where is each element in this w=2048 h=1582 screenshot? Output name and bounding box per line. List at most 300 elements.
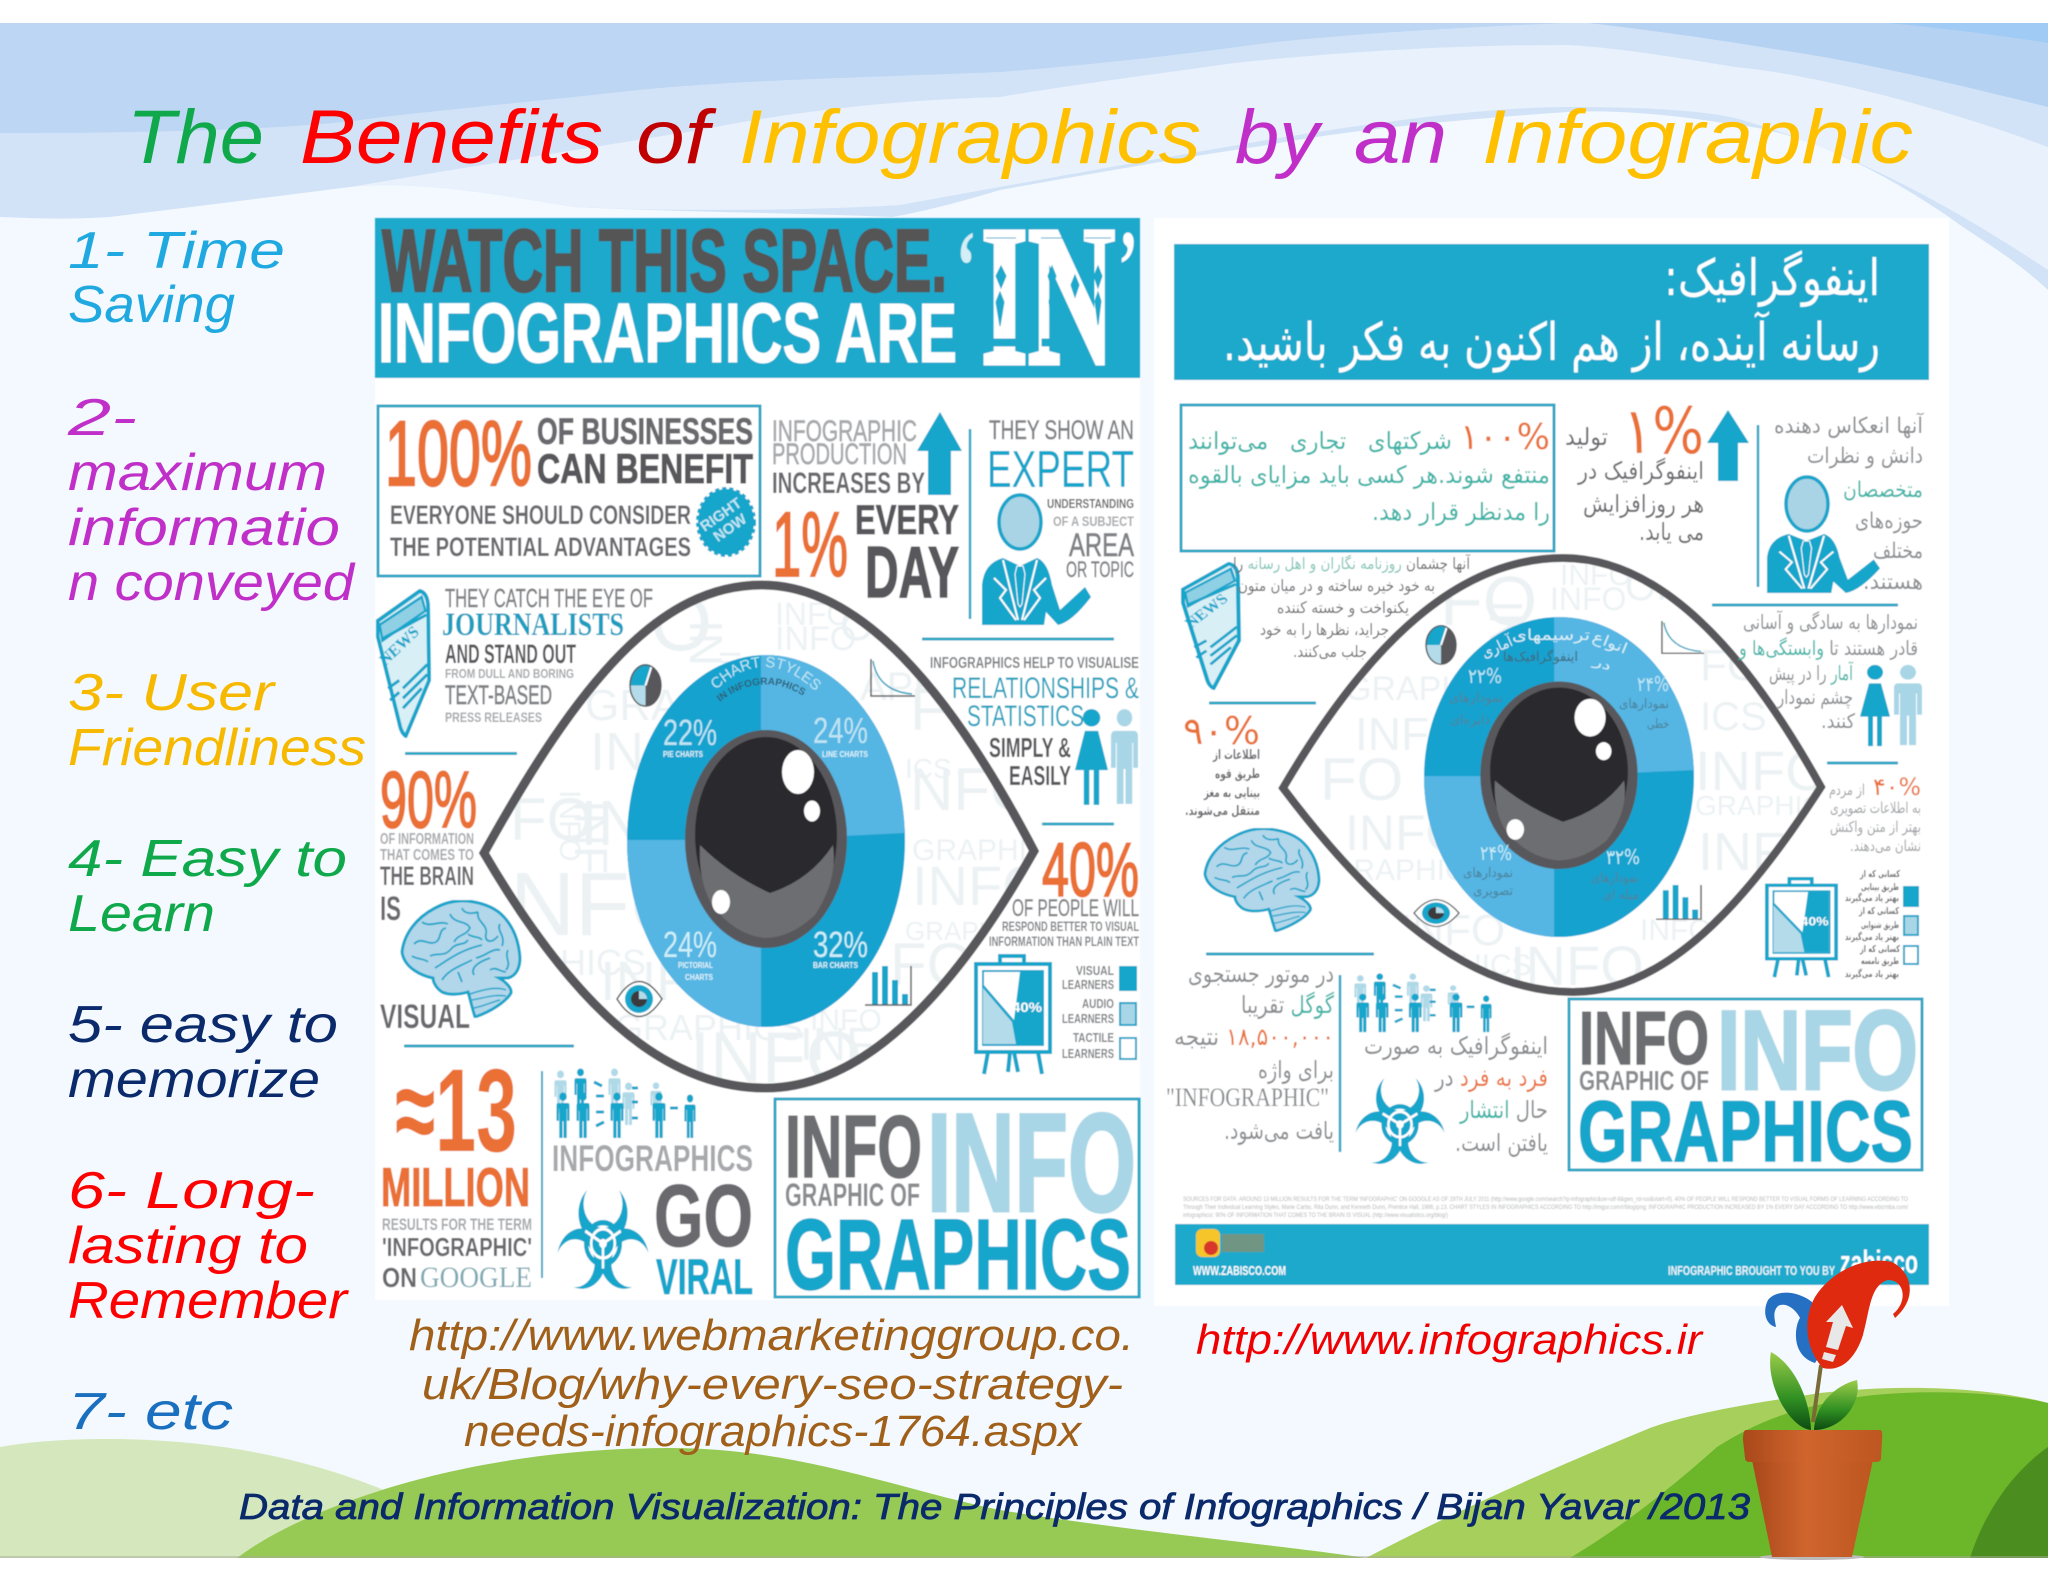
- watermark text: [1320, 559, 1841, 997]
- iris labels: 24%: [813, 710, 868, 751]
- 40 percent block: نشان می‌دهند.: [1850, 837, 1921, 855]
- legend: بهتر یاد می‌گیرند: [1845, 968, 1899, 980]
- 40 percent block: [976, 824, 1139, 1074]
- expert block: متخصصان: [1843, 478, 1923, 503]
- watermark text: INFO: [775, 596, 851, 632]
- blue paisley: [1765, 1293, 1830, 1363]
- item 6: lasting to: [68, 1217, 308, 1275]
- callout: 100 percent box: EVERYONE SHOULD CONSIDER: [390, 500, 691, 530]
- iris labels: دایره‌ای: [1450, 713, 1490, 728]
- relationships block: [922, 639, 1139, 805]
- journalists block: THEY CATCH THE EYE OF: [445, 583, 653, 613]
- watermark text: INFO: [775, 620, 856, 658]
- icon: crowd: [554, 1068, 696, 1138]
- icon: couple: [1075, 709, 1138, 805]
- 40 percent block: INFORMATION THAN PLAIN TEXT: [989, 933, 1139, 949]
- title: Infographic: [1482, 95, 1913, 180]
- iris labels: نمودارهای: [1463, 866, 1513, 881]
- icon: brain: [402, 901, 520, 1017]
- journalists block: AND STAND OUT: [445, 639, 576, 669]
- source url left: http://www.webmarketinggroup.co.: [409, 1311, 1134, 1360]
- relationships block: INFOGRAPHICS HELP TO VISUALISE: [930, 655, 1139, 672]
- callout: 100 percent box: OF BUSINESSES: [537, 411, 753, 452]
- icon: couple: [1860, 665, 1922, 746]
- legend: AUDIO: [1082, 996, 1114, 1011]
- relationships block: RELATIONSHIPS &: [952, 672, 1139, 705]
- banner: WATCH THIS SPACE.: [382, 211, 947, 310]
- google stat: RESULTS FOR THE TERM: [382, 1215, 532, 1234]
- google stat: GOOGLE: [420, 1261, 532, 1294]
- legend: طریق نامسه: [1861, 956, 1899, 967]
- legend: کسانی که از: [1859, 869, 1900, 880]
- title: Infographics: [739, 95, 1201, 180]
- expert block: دانش و نظرات: [1807, 444, 1923, 469]
- watermark text: ICS: [1700, 695, 1767, 739]
- icon: expert: [982, 495, 1091, 625]
- iris labels: نمودارهای: [1449, 691, 1503, 706]
- iris labels: میله ای: [1603, 888, 1639, 903]
- item 7: 7- etc: [68, 1383, 233, 1441]
- journalists block: [376, 583, 653, 736]
- journalists block: TEXT-BASED: [445, 680, 552, 710]
- 40 percent block: [1767, 763, 1921, 980]
- iris labels: 24%: [663, 924, 717, 965]
- icon: newspaper: [376, 591, 429, 736]
- viral block: [548, 1068, 753, 1305]
- item 5: memorize: [68, 1051, 320, 1109]
- watermark text: INFO: [553, 790, 586, 862]
- info graphic box: GRAPHIC OF: [1579, 1065, 1709, 1096]
- icon: pie chart: [630, 664, 661, 706]
- watermark text: INFO: [1640, 914, 1712, 947]
- legend: کسانی که از: [1859, 944, 1900, 955]
- legend: بهتر یاد می‌گیرند: [1845, 892, 1899, 904]
- 90 percent block: منتقل می‌شوند.: [1185, 804, 1260, 819]
- expert block: OF A SUBJECT: [1053, 513, 1134, 529]
- item 2: [67, 389, 356, 612]
- legend: TACTILE: [1073, 1030, 1114, 1045]
- info graphic box: GRAPHICS: [785, 1199, 1131, 1311]
- footer bar: INFOGRAPHIC BROUGHT TO YOU BY: [1668, 1263, 1835, 1278]
- production stat: [772, 412, 962, 613]
- callout: 100 percent box: ۱۰۰%: [1460, 417, 1550, 458]
- expert block: مختلف: [1873, 539, 1923, 564]
- production stat: می یابد.: [1639, 518, 1704, 546]
- watermark text: IN: [1480, 600, 1532, 646]
- google stat: ON: [382, 1262, 417, 1293]
- badge: right now: RIGHT: [697, 495, 745, 535]
- iris labels: تصویری: [1473, 884, 1513, 899]
- 40 percent block: 40%: [1042, 828, 1139, 913]
- google stat: MILLION: [381, 1156, 530, 1218]
- watermark text: INF: [1355, 708, 1429, 760]
- legend: LEARNERS: [1062, 1046, 1114, 1061]
- watermark text: INF: [565, 800, 617, 874]
- footer bar: [1175, 1224, 1929, 1285]
- production stat: تولید: [1565, 423, 1608, 451]
- panel: english infographic: [374, 186, 1142, 1311]
- relationships block: قادر هستند تا وابستگی‌ها و: [1738, 636, 1918, 660]
- iris labels: آماری: [1479, 632, 1516, 662]
- icon: bar chart: [865, 966, 911, 1005]
- 90 percent block: اطلاعات از: [1212, 748, 1260, 763]
- expert block: آنها انعکاس دهنده: [1774, 412, 1924, 439]
- journalists block: JOURNALISTS: [442, 607, 624, 643]
- pot: [1743, 1430, 1882, 1560]
- watermark text: FO: [910, 676, 993, 743]
- production stat: INCREASES BY: [772, 467, 925, 500]
- item 4: [68, 830, 347, 943]
- icon: biohazard: [1346, 1069, 1454, 1173]
- legend: بهتر یاد می‌گیرند: [1845, 931, 1899, 943]
- info graphic box: INFO: [1717, 988, 1918, 1113]
- watermark text: OIF: [1625, 565, 1692, 609]
- panel: persian infographic: [1154, 218, 1949, 1306]
- watermark text: GRAPHICS: [912, 834, 1069, 867]
- production stat: INFOGRAPHIC: [772, 415, 917, 448]
- item 3: Friendliness: [68, 719, 366, 777]
- watermark text: INFO: [1400, 906, 1505, 955]
- 40 percent block: به اطلاعات تصویری: [1830, 799, 1921, 817]
- 40 percent block: OF PEOPLE WILL: [1012, 895, 1139, 922]
- 40 percent block: بهتر از متن واکنش: [1830, 818, 1921, 836]
- icon: potted plant logo: [1743, 1261, 1910, 1560]
- source urls: [409, 1311, 1704, 1456]
- production stat: PRODUCTION: [772, 438, 907, 471]
- info graphic box: GRAPHICS: [1578, 1084, 1913, 1180]
- iris labels: 32%: [813, 924, 868, 965]
- watermark text: GRAPH: [1345, 670, 1466, 708]
- arrow up: [917, 412, 962, 495]
- callout: 100 percent box: را مدنظر قرار دهد.: [1372, 498, 1550, 526]
- eye outline: [1283, 558, 1821, 992]
- google stat: ۱۸,۵۰۰,۰۰۰ نتیجه: [1174, 1023, 1334, 1051]
- item 2: 2-: [67, 389, 137, 447]
- callout: 100 percent box: [1181, 405, 1554, 551]
- icon: easel: [976, 956, 1050, 1074]
- item 5: 5- easy to: [68, 996, 338, 1054]
- expert block: [1758, 412, 1924, 595]
- watermark text: GRA: [585, 681, 681, 730]
- eye iris and pupil: [1424, 617, 1694, 937]
- banner: رسانه آینده، از هم اکنون به فکر باشید.: [1223, 310, 1880, 373]
- 90 percent block: IS: [380, 890, 401, 928]
- info graphic box: INFO: [1579, 996, 1709, 1080]
- production stat: اینفوگرافیک در: [1577, 457, 1704, 485]
- google stat: در موتور جستجوی: [1188, 960, 1334, 988]
- watermark text: NFO: [910, 756, 1037, 823]
- watermark text: INFO: [1695, 739, 1829, 802]
- watermark text: FO: [890, 931, 973, 998]
- info graphic box: [1569, 988, 1922, 1180]
- banner: اینفوگرافیک:: [1664, 249, 1880, 307]
- icon: line chart: [1662, 621, 1704, 653]
- relationships block: STATISTICS: [967, 700, 1084, 733]
- decorative IN lettering: [956, 186, 1138, 407]
- footer citation: Data and Information Visualization: The Principles of Infographics / Bijan Yavar /2013: [239, 1486, 1750, 1527]
- watermark text: GRAPHICS: [1330, 854, 1487, 887]
- expert block: THEY SHOW AN: [989, 415, 1134, 445]
- iris labels: نمودارهای: [1591, 871, 1639, 886]
- iris labels: ۲۴%: [1480, 841, 1512, 865]
- legend: کسانی که از: [1858, 906, 1899, 917]
- 40 percent block: ۴۰%: [1873, 773, 1921, 801]
- leaves: [1770, 1352, 1811, 1430]
- title: Benefits: [300, 95, 603, 180]
- icon: expert: [1767, 477, 1880, 593]
- google stat: برای واژه: [1258, 1056, 1334, 1084]
- expert block: EXPERT: [987, 441, 1134, 499]
- expert block: AREA: [1069, 527, 1134, 563]
- google stat: [381, 1045, 574, 1294]
- source url right: http://www.infographics.ir: [1196, 1316, 1704, 1363]
- journalists block: یکنواخت و خسته کننده: [1277, 598, 1409, 618]
- banner: [375, 186, 1140, 407]
- watermark text: APHICS: [860, 665, 1009, 709]
- 90 percent block: VISUAL: [380, 998, 470, 1036]
- logo: [1196, 1229, 1264, 1257]
- relationships block: آمار را در پیش: [1769, 660, 1854, 686]
- viral block: فرد به فرد در: [1434, 1064, 1548, 1092]
- watermark text: GRAPHICS: [615, 1007, 803, 1048]
- title: of: [636, 95, 717, 180]
- badge: right now: NOW: [710, 510, 751, 546]
- 90 percent block: [1183, 703, 1319, 931]
- viral block: [1346, 973, 1548, 1173]
- production stat: [1565, 395, 1749, 546]
- expert block: هستند.: [1863, 570, 1923, 595]
- legend: LEARNERS: [1062, 1011, 1114, 1026]
- 90 percent block: THE BRAIN: [380, 861, 474, 891]
- viral block: اینفوگرافیک به صورت: [1364, 1032, 1548, 1060]
- decorative IN lettering: ‘: [956, 210, 976, 321]
- watermark text: GRAPHICS: [1695, 790, 1841, 821]
- title: [127, 95, 1913, 180]
- legend: طریق بینایی: [1861, 882, 1899, 893]
- watermark text: FO: [1320, 746, 1403, 813]
- watermark text: FO: [1440, 562, 1537, 640]
- white arrow: [1822, 1305, 1853, 1362]
- legend: LEARNERS: [1062, 977, 1114, 992]
- iris labels: 22%: [663, 712, 717, 753]
- production stat: ۱%: [1623, 395, 1704, 469]
- icon: bar chart: [1656, 885, 1701, 919]
- title: an: [1354, 95, 1447, 180]
- banner: INFOGRAPHICS ARE: [378, 286, 957, 380]
- item 3: [68, 664, 366, 777]
- watermark text: FO: [510, 786, 593, 853]
- benefits list: [67, 222, 366, 1441]
- 90 percent block: ۹۰%: [1183, 709, 1260, 753]
- footer bar: WWW.ZABISCO.COM: [1193, 1263, 1286, 1278]
- watermark text: IN: [680, 620, 732, 666]
- info graphic box: INFO: [785, 1097, 922, 1196]
- eye iris and pupil: [627, 655, 905, 1027]
- iris labels: خطی: [1647, 717, 1669, 732]
- callout: 100 percent box: [378, 403, 760, 576]
- legend: [1062, 963, 1136, 1061]
- item 2: n conveyed: [68, 554, 356, 612]
- expert block: UNDERSTANDING: [1047, 496, 1134, 511]
- expert block: حوزه‌های: [1855, 509, 1923, 534]
- journalists block: آنها چشمان روزنامه نگاران و اهل رسانه را: [1233, 554, 1471, 574]
- item 1: [68, 222, 285, 334]
- watermark text: INF: [580, 787, 683, 859]
- banner: [1174, 244, 1929, 380]
- source url left: uk/Blog/why-every-seo-strategy-: [422, 1360, 1123, 1409]
- icon: small eye: [1414, 900, 1459, 927]
- watermark text: HICS: [560, 942, 646, 983]
- iris labels: CHART STYLES: [710, 656, 822, 690]
- item 6: Remember: [68, 1272, 350, 1330]
- icon: brain: [1205, 829, 1319, 931]
- watermark text: GRAPHICS: [905, 916, 1041, 946]
- watermark text: INFO: [810, 1004, 882, 1037]
- badge: right now: [697, 489, 754, 555]
- watermark text: NFO: [510, 855, 700, 955]
- relationships block: نمودارها به سادگی و آسانی: [1743, 609, 1918, 634]
- info graphic box: GRAPHIC OF: [785, 1177, 920, 1213]
- watermark text: O: [650, 578, 712, 667]
- source url left: needs-infographics-1764.aspx: [464, 1407, 1083, 1456]
- 40 percent block: از مردم: [1829, 781, 1865, 799]
- iris labels: ۳۲%: [1606, 845, 1640, 869]
- watermark text: NFO: [600, 1044, 663, 1077]
- iris labels: ترسیمهای: [1512, 626, 1590, 644]
- watermark text: INFO: [912, 854, 1046, 917]
- google stat: گوگل تقریبا: [1241, 991, 1334, 1019]
- viral block: INFOGRAPHICS: [552, 1138, 753, 1179]
- watermark text: INFO: [600, 949, 734, 1012]
- icon: line chart: [871, 659, 915, 696]
- iris labels: انواع: [1590, 628, 1630, 658]
- relationships block: [1712, 605, 1922, 746]
- watermark text: INFO: [690, 1018, 862, 1098]
- watermark text: INF: [800, 1018, 874, 1070]
- legend: طریق شنوایی: [1861, 920, 1899, 931]
- google stat: "INFOGRAPHIC": [1166, 1083, 1329, 1112]
- 40 percent block: RESPOND BETTER TO VISUAL: [1002, 918, 1139, 934]
- info graphic box: INFO: [927, 1084, 1136, 1241]
- item 2: maximum: [68, 444, 327, 502]
- relationships block: EASILY: [1009, 760, 1071, 791]
- item 1: 1- Time: [68, 222, 285, 280]
- watermark text: INFO: [1345, 805, 1464, 861]
- callout: 100 percent box: منتفع شوند.هر کسی باید مزایای بالقوه: [1188, 461, 1550, 489]
- relationships block: چشم نمودار: [1776, 685, 1853, 709]
- viral block: VIRAL: [656, 1249, 753, 1305]
- iris labels: [1449, 626, 1669, 903]
- footer bar: zabisco: [1840, 1244, 1918, 1280]
- stem: [1813, 1365, 1821, 1422]
- relationships block: SIMPLY &: [989, 732, 1071, 763]
- iris labels: CHARTS: [685, 973, 714, 982]
- iris labels: PICTORIAL: [678, 961, 713, 970]
- legend: [1845, 869, 1918, 980]
- google stat: [1166, 954, 1374, 1152]
- arrow up: [1707, 410, 1749, 481]
- icon: easel: [1767, 879, 1836, 977]
- title: by: [1235, 95, 1323, 180]
- sources: Through Their Individual Learning Styles, Marie Carbo, Rita Dunn, and Kenneth Dunn, Prentice Hall, 1986, p.13. CHART STYLES IN INFOGRAPHICS ACCORDING TO http://imgur.com/r/blog/png; INFOGRAPHIC PRODUCTION INCREASED BY 1% EVERY DAY ACCORDING TO http://www.ebizmba.com/: [1183, 1204, 1908, 1211]
- 90 percent block: [380, 754, 520, 1036]
- callout: 100 percent box: 100%: [385, 403, 532, 505]
- production stat: DAY: [865, 533, 959, 613]
- expert block: OR TOPIC: [1066, 557, 1134, 582]
- item 4: Learn: [68, 885, 215, 943]
- source url left: [409, 1311, 1134, 1456]
- item 6: 6- Long-: [68, 1162, 315, 1220]
- production stat: هر روزافزایش: [1583, 490, 1704, 518]
- item 6: [68, 1162, 350, 1330]
- google stat: 'INFOGRAPHIC': [382, 1232, 532, 1262]
- watermark text: IN: [713, 650, 746, 680]
- iris labels: ۲۲%: [1468, 664, 1502, 688]
- expert block: [970, 415, 1134, 625]
- 90 percent block: OF INFORMATION: [380, 831, 474, 848]
- title: The: [127, 95, 264, 180]
- icon: pie chart: [1426, 625, 1456, 664]
- watermark text: INFO: [1698, 822, 1827, 882]
- icon: biohazard: [548, 1180, 658, 1300]
- sources: [1183, 1196, 1908, 1219]
- watermark text: INFO: [1550, 581, 1626, 617]
- iris labels: نمودارهای: [1619, 697, 1669, 712]
- iris labels: PIE CHARTS: [663, 750, 704, 759]
- 90 percent block: طریق قوه: [1215, 767, 1260, 782]
- red paisley: [1807, 1261, 1910, 1369]
- production stat: EVERY: [855, 496, 959, 543]
- item 2: informatio: [68, 499, 340, 557]
- iris labels: [662, 656, 869, 982]
- decorative IN lettering: IN: [981, 186, 1115, 407]
- watermark text: APHICS: [1420, 949, 1532, 982]
- journalists block: PRESS RELEASES: [445, 709, 542, 725]
- watermark text: IN: [590, 722, 644, 782]
- journalists block: جلب می‌کنند.: [1293, 642, 1367, 661]
- watermark text: [514, 602, 1024, 1082]
- item 1: Saving: [68, 276, 235, 334]
- google stat: یافت می‌شود.: [1224, 1117, 1334, 1145]
- info graphic box: [775, 1084, 1139, 1311]
- watermark text: INFO: [1510, 934, 1644, 997]
- iris labels: LINE CHARTS: [822, 750, 869, 759]
- journalists block: [1182, 554, 1471, 688]
- callout: 100 percent box: شرکتهای تجاری می‌توانند: [1188, 427, 1452, 455]
- watermark text: INFO: [1560, 559, 1632, 592]
- green hills: [0, 1388, 2048, 1558]
- icon: newspaper: [1182, 564, 1239, 688]
- decorative IN lettering: ’: [1118, 210, 1138, 321]
- viral block: یافتن است.: [1455, 1129, 1548, 1157]
- google stat: ≈13: [395, 1045, 517, 1177]
- journalists block: جراید، نظرها را به خود: [1260, 620, 1389, 640]
- viral block: GO: [654, 1166, 753, 1265]
- item 3: 3- User: [68, 664, 277, 722]
- watermark text: IN: [640, 754, 670, 787]
- icon: crowd: [1354, 973, 1492, 1032]
- watermark text: ICS: [905, 753, 952, 784]
- relationships block: کنند.: [1821, 709, 1855, 733]
- callout: 100 percent box: THE POTENTIAL ADVANTAGES: [390, 532, 691, 562]
- sources: infographics/; 90% OF INFORMATION THAT COMES TO THE BRAIN IS VISUAL (http://www.visualistics.org/blog/): [1183, 1212, 1448, 1219]
- production stat: 1%: [772, 494, 848, 596]
- iris labels: BAR CHARTS: [813, 961, 859, 970]
- 90 percent block: 90%: [380, 755, 477, 844]
- callout: 100 percent box: CAN BENEFIT: [537, 445, 753, 492]
- item 4: 4- Easy to: [68, 830, 347, 888]
- iris labels: اینفوگرافیک‌ها: [1503, 649, 1578, 665]
